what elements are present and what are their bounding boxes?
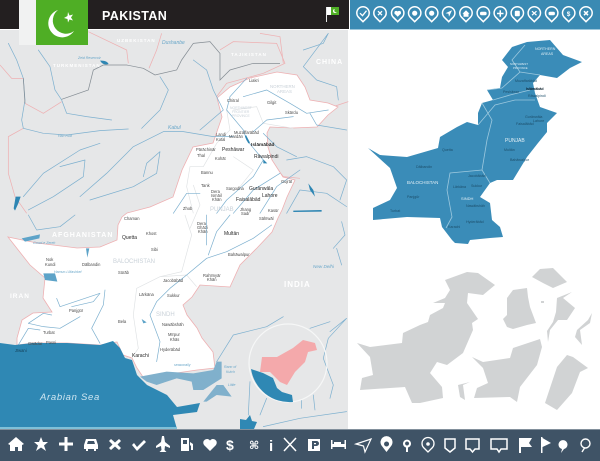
icon: flag: [519, 438, 532, 453]
blue map labels: AREAS: [541, 52, 554, 56]
city labels: Peshāwar: [222, 147, 245, 153]
city labels: Pārāchinār: [196, 147, 216, 152]
sea: [0, 341, 200, 429]
blue map labels: Multān: [504, 148, 515, 152]
water labels: Rann of: [224, 365, 237, 369]
title: PAKISTAN: [102, 9, 167, 23]
city labels: Sadr: [241, 211, 250, 216]
blue map labels: Sukkur: [471, 184, 483, 188]
pin glyphs: $: [567, 11, 571, 18]
small flag icon: [326, 7, 339, 22]
city labels: Tank: [201, 183, 211, 188]
grey region: tribal areas: [575, 313, 592, 345]
water labels: Kabul: [168, 125, 182, 131]
bottom icon bar: [0, 429, 600, 461]
blue map labels: Peshāwar: [503, 90, 520, 94]
icon: bubble: [466, 439, 479, 452]
city labels: Khān: [207, 277, 217, 282]
icon: cross: [109, 439, 121, 450]
blue map labels: Lārkāna: [453, 185, 466, 189]
icon: command: ⌘: [249, 439, 259, 452]
blue map labels: Faisalābād: [516, 122, 534, 126]
rivers north: [8, 33, 347, 213]
city labels: Khān: [198, 229, 208, 234]
city labels: Khān: [212, 197, 222, 202]
grey region: NWFP: [547, 292, 575, 342]
water labels: Zeid Reservoir: [77, 56, 102, 60]
province borders: [132, 185, 200, 358]
city labels: Hyderābād: [160, 347, 181, 352]
city labels: Nok: [46, 257, 54, 262]
blue map labels: Dālbandin: [416, 165, 432, 169]
upper province borders: [187, 107, 293, 213]
country labels: [10, 38, 343, 403]
city labels: Muzaffarābād: [234, 130, 260, 135]
icon: star: [34, 437, 48, 451]
blue map labels: PUNJAB: [505, 138, 525, 144]
icon: pin: [381, 436, 392, 452]
water labels: Hamun-i-Mashkel: [54, 270, 82, 274]
city labels: Jhang: [240, 207, 252, 212]
city labels: Sāhīwāl: [259, 216, 274, 221]
blue map of Pakistan: [368, 40, 582, 244]
neighbouring country borders: [0, 32, 348, 213]
city labels: Pasni: [46, 340, 56, 345]
country labels: CHINA: [316, 59, 343, 66]
city labels: Dera: [197, 221, 207, 226]
blue map labels: Panjgūr: [407, 195, 420, 199]
panel: blue pin bar: [350, 0, 600, 30]
icon: lollipop: [558, 440, 568, 453]
country labels: UZBEKISTAN: [117, 38, 156, 43]
city labels: Quetta: [122, 235, 137, 241]
province labels: FRONTIER: [232, 110, 250, 114]
water labels: [33, 40, 335, 387]
rivers south: [18, 215, 347, 427]
blue map labels: Rāwalpindi: [528, 94, 546, 98]
blue map labels: Hyderābād: [466, 220, 484, 224]
icon: info: i: [269, 438, 273, 455]
city labels: Multān: [224, 231, 239, 237]
city labels: Karachi: [132, 353, 149, 359]
icon: cutlery: [284, 438, 296, 451]
blue map labels: Karachi: [448, 225, 460, 229]
grey region: islet: [458, 382, 470, 400]
gulf inlet: [240, 415, 257, 429]
icon: slim pin: [403, 440, 411, 452]
blue map labels: Islāmābād: [526, 87, 544, 91]
icon: pennant: [541, 437, 551, 453]
city labels: Bahāwalpur: [228, 252, 250, 257]
city labels: Bannu: [201, 170, 213, 175]
water labels: Dushanbe: [162, 40, 185, 46]
city labels: Jacobābād: [163, 278, 184, 283]
icon: magnifier: [581, 439, 590, 452]
city labels: Lahore: [262, 193, 278, 199]
blue map labels: PROVINCE: [513, 66, 528, 70]
icon: heart: [203, 439, 217, 451]
grey region: Punjab: [545, 355, 588, 410]
grey region: small dot: [541, 301, 544, 303]
grey region: Sindh: [503, 288, 536, 329]
icon: check: [132, 440, 146, 451]
blue map labels: NORTHWEST: [510, 62, 528, 66]
city labels: Jīwani: [15, 348, 27, 353]
city labels: Kundi: [45, 262, 56, 267]
province labels: NORTHERN: [270, 84, 295, 89]
water labels: Hari Rud: [58, 134, 73, 138]
city labels: Kasūr: [268, 208, 279, 213]
icon: navigation: [356, 439, 371, 452]
city labels: Sibi: [151, 247, 158, 252]
icon: home: [8, 437, 24, 451]
city labels: Chaman: [124, 216, 140, 221]
country labels: AFGHANISTAN: [52, 232, 113, 239]
blue map labels: SINDH: [461, 196, 474, 201]
blue map labels: NORTHERN: [535, 47, 556, 51]
city labels: [15, 78, 298, 359]
water labels: seasonally: [174, 363, 191, 367]
city labels: Rāwalpindi: [254, 154, 278, 160]
icon: plus: [59, 437, 73, 451]
province labels: SINDH: [156, 312, 175, 318]
city labels: Zhob: [183, 206, 193, 211]
province labels: PUNJAB: [210, 207, 234, 213]
city labels: Liakri: [249, 78, 259, 83]
water labels: Little: [228, 383, 235, 387]
grey map of Pakistan: [357, 272, 495, 403]
icon: square pin: [445, 439, 455, 452]
city labels: Nawābshāh: [162, 322, 184, 327]
city labels: Thal: [197, 153, 205, 158]
city labels: Mīrpur: [168, 332, 180, 337]
icon: fuel: [181, 438, 193, 451]
city labels: Gurānwāla: [249, 186, 273, 192]
city labels: Khost: [146, 231, 157, 236]
city labels: Sukkur: [167, 293, 180, 298]
city labels: Gwādar: [28, 341, 43, 346]
icon: car: [84, 439, 98, 451]
flag: [19, 0, 88, 45]
city labels: Bela: [118, 319, 127, 324]
blue map labels: Jacobābād: [468, 174, 486, 178]
blue map labels: Gurānwāla: [525, 115, 542, 119]
icon: target pin: [422, 438, 434, 452]
province labels: AREAS: [277, 89, 292, 94]
grey region: Balochistan: [472, 339, 542, 402]
blue map labels: Lahore: [533, 119, 544, 123]
blue map labels: Nawābshāh: [466, 204, 485, 208]
city labels: Lārkāna: [139, 292, 155, 297]
province borders: [446, 45, 540, 228]
water labels: Gowd-e Zereh: [33, 241, 55, 245]
city labels: Sūrāb: [118, 270, 130, 275]
country labels: TURKMENISTAN: [53, 63, 101, 68]
header bar: [0, 0, 349, 29]
panel: detailed map of Pakistan: [0, 30, 348, 429]
icon: wide bubble: [491, 439, 507, 452]
pin glyphs: [360, 10, 588, 18]
blue map labels: Quetta: [442, 148, 453, 152]
city labels: Dera: [211, 189, 221, 194]
city labels: Panjgūr: [69, 308, 84, 313]
city labels: Faisalābād: [236, 197, 261, 203]
country labels: INDIA: [284, 280, 311, 289]
city labels: Ismāil: [211, 193, 222, 198]
city labels: Dālbandin: [82, 262, 101, 267]
province labels: NORTHWEST: [230, 106, 252, 110]
pin icons: [357, 7, 592, 22]
blue map labels: Turbat: [390, 209, 400, 213]
water labels: Kutch: [226, 370, 235, 374]
blue map labels: [390, 47, 556, 229]
icon: bed: [331, 440, 346, 449]
city labels: Turbat: [43, 330, 56, 335]
blue map labels: BALOCHISTAN: [407, 180, 438, 185]
blue map labels: Bahāwalpur: [510, 158, 530, 162]
icon: dollar: $: [226, 437, 234, 453]
city labels: Rahīmyār: [203, 273, 221, 278]
province labels: [113, 84, 295, 318]
city labels: Khās: [170, 337, 179, 342]
city labels: Gilgit: [267, 100, 277, 105]
Pakistan territory: [8, 72, 338, 377]
city labels: Islāmābād: [251, 142, 275, 148]
country labels: TAJIKISTAN: [231, 52, 267, 57]
city labels: Gujrāt: [281, 179, 293, 184]
country labels: IRAN: [10, 293, 30, 300]
city labels: Landi: [216, 132, 226, 137]
grey region: northern areas: [532, 268, 567, 288]
city labels: Kohāt: [215, 156, 227, 161]
country labels: Arabian Sea: [39, 392, 100, 403]
salt marsh: [140, 362, 222, 390]
province labels: BALOCHISTAN: [113, 259, 155, 265]
inset locator: [249, 324, 327, 402]
blue map labels: Muzaffarābād: [515, 79, 537, 83]
city labels: Chitral: [227, 98, 239, 103]
water labels: New Delhi: [313, 264, 335, 269]
city labels: Mardān: [229, 134, 244, 139]
city labels: Kotal: [216, 137, 225, 142]
icon: parking: [308, 439, 320, 451]
province labels: PROVINCE: [232, 114, 250, 118]
city labels: Ghāzi: [197, 225, 208, 230]
icon: plane: [156, 436, 170, 452]
city labels: Sargodha: [226, 186, 244, 191]
city labels: Skārdu: [285, 110, 298, 115]
